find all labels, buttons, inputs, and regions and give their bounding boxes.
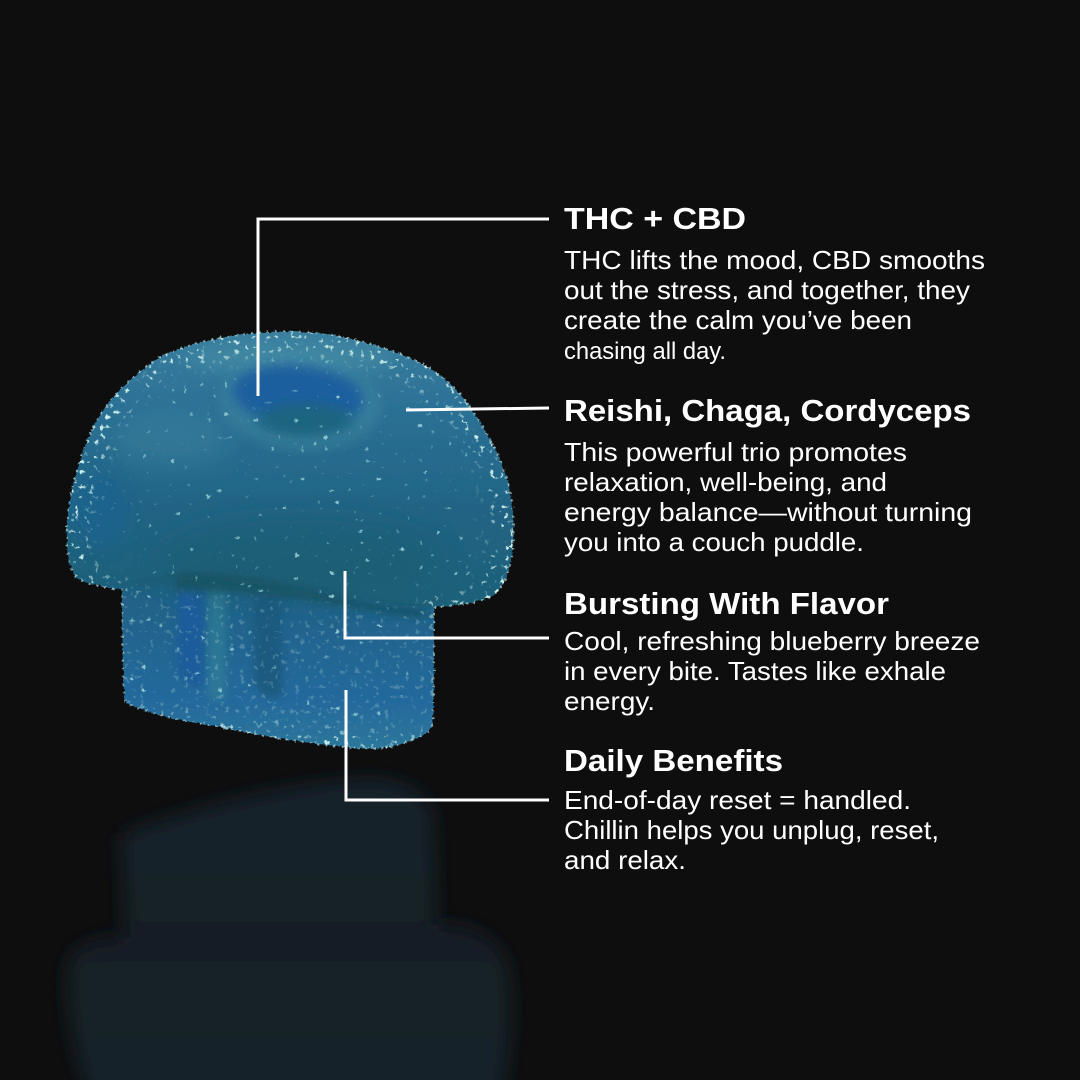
heading: THC + CBD bbox=[564, 201, 746, 236]
gummy mushroom illustration bbox=[60, 320, 520, 760]
line: THC + CBD bbox=[258, 219, 549, 396]
body text: create the calm you’ve been bbox=[564, 305, 912, 335]
cap pale highlight bbox=[197, 346, 382, 370]
callout lines bbox=[258, 219, 549, 800]
sugar crystals bbox=[60, 320, 520, 760]
body text: chasing all day. bbox=[564, 338, 726, 365]
frosted rim bbox=[67, 332, 514, 749]
body text: energy. bbox=[564, 686, 655, 716]
body text bbox=[564, 626, 980, 716]
body text: End-of-day reset = handled. bbox=[564, 785, 911, 815]
callout: THC + CBD bbox=[564, 201, 985, 365]
line: Bursting With Flavor bbox=[345, 571, 549, 638]
line: Daily Benefits bbox=[346, 690, 549, 800]
body text: you into a couch puddle. bbox=[564, 527, 864, 557]
stem grooves bbox=[178, 590, 283, 700]
body text: energy balance—without turning bbox=[564, 497, 972, 527]
body text: and relax. bbox=[564, 845, 686, 875]
body text bbox=[564, 437, 972, 557]
body text bbox=[564, 785, 939, 875]
stem bbox=[100, 560, 450, 760]
callout: Bursting With Flavor bbox=[564, 586, 980, 716]
cap bbox=[60, 320, 520, 607]
body text: This powerful trio promotes bbox=[564, 437, 907, 467]
blurred reflection of the gummy bbox=[68, 780, 510, 1080]
body text: THC lifts the mood, CBD smooths bbox=[564, 245, 985, 275]
body text: relaxation, well-being, and bbox=[564, 467, 887, 497]
body text bbox=[564, 245, 985, 365]
body text: in every bite. Tastes like exhale bbox=[564, 656, 946, 686]
body text: Chillin helps you unplug, reset, bbox=[564, 815, 939, 845]
body text: out the stress, and together, they bbox=[564, 275, 970, 305]
callout: Reishi, Chaga, Cordyceps bbox=[564, 393, 972, 557]
mushroom body bbox=[60, 320, 520, 760]
body text: Cool, refreshing blueberry breeze bbox=[564, 626, 980, 656]
heading: Bursting With Flavor bbox=[564, 586, 889, 621]
line: Reishi, Chaga, Cordyceps bbox=[406, 408, 549, 410]
callout: Daily Benefits bbox=[564, 743, 939, 875]
crater bbox=[224, 358, 377, 450]
cap left darker patch bbox=[83, 473, 118, 540]
shadow under cap bbox=[177, 574, 425, 618]
heading: Reishi, Chaga, Cordyceps bbox=[564, 393, 971, 428]
heading: Daily Benefits bbox=[564, 743, 783, 778]
